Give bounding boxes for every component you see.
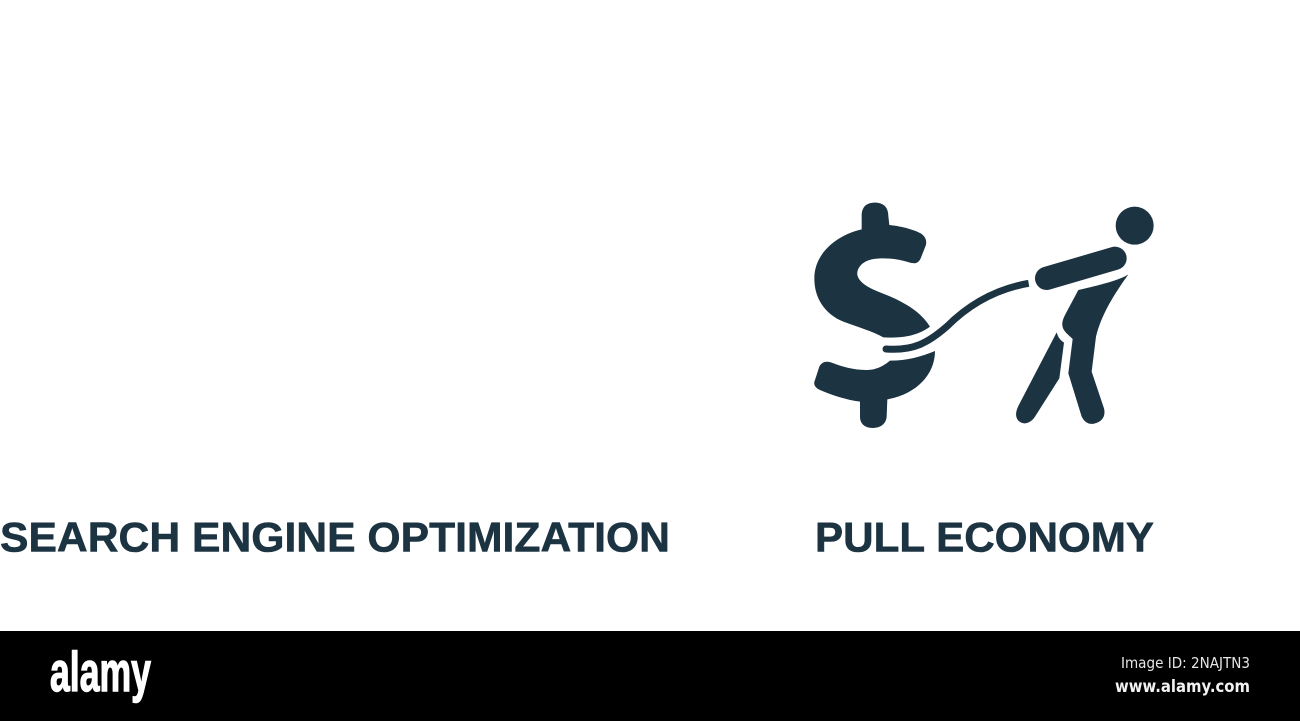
icon part: dollar sign lower half bbox=[814, 351, 935, 428]
watermark footer bar bbox=[0, 631, 1300, 721]
footer text: image id: Image ID: 2NAJTN3 bbox=[1121, 654, 1250, 672]
icon part: rope bbox=[882, 283, 1029, 352]
footer text: website: www.alamy.com bbox=[1115, 677, 1250, 696]
icon part: dollar sign upper half bbox=[814, 203, 930, 338]
icon part: torso and front leg bbox=[1062, 274, 1128, 424]
footer logo: alamy: alamy bbox=[50, 640, 151, 703]
icon part: back leg bbox=[1016, 332, 1064, 423]
heading: search engine optimization: SEARCH ENGINE OPTIMIZATION bbox=[0, 514, 670, 560]
icon part: arm bbox=[1047, 258, 1115, 278]
heading: pull economy: PULL ECONOMY bbox=[815, 514, 1154, 560]
icon: pull economy, person pulling a dollar sign with a rope bbox=[814, 203, 1154, 428]
icon part: head bbox=[1116, 207, 1154, 245]
